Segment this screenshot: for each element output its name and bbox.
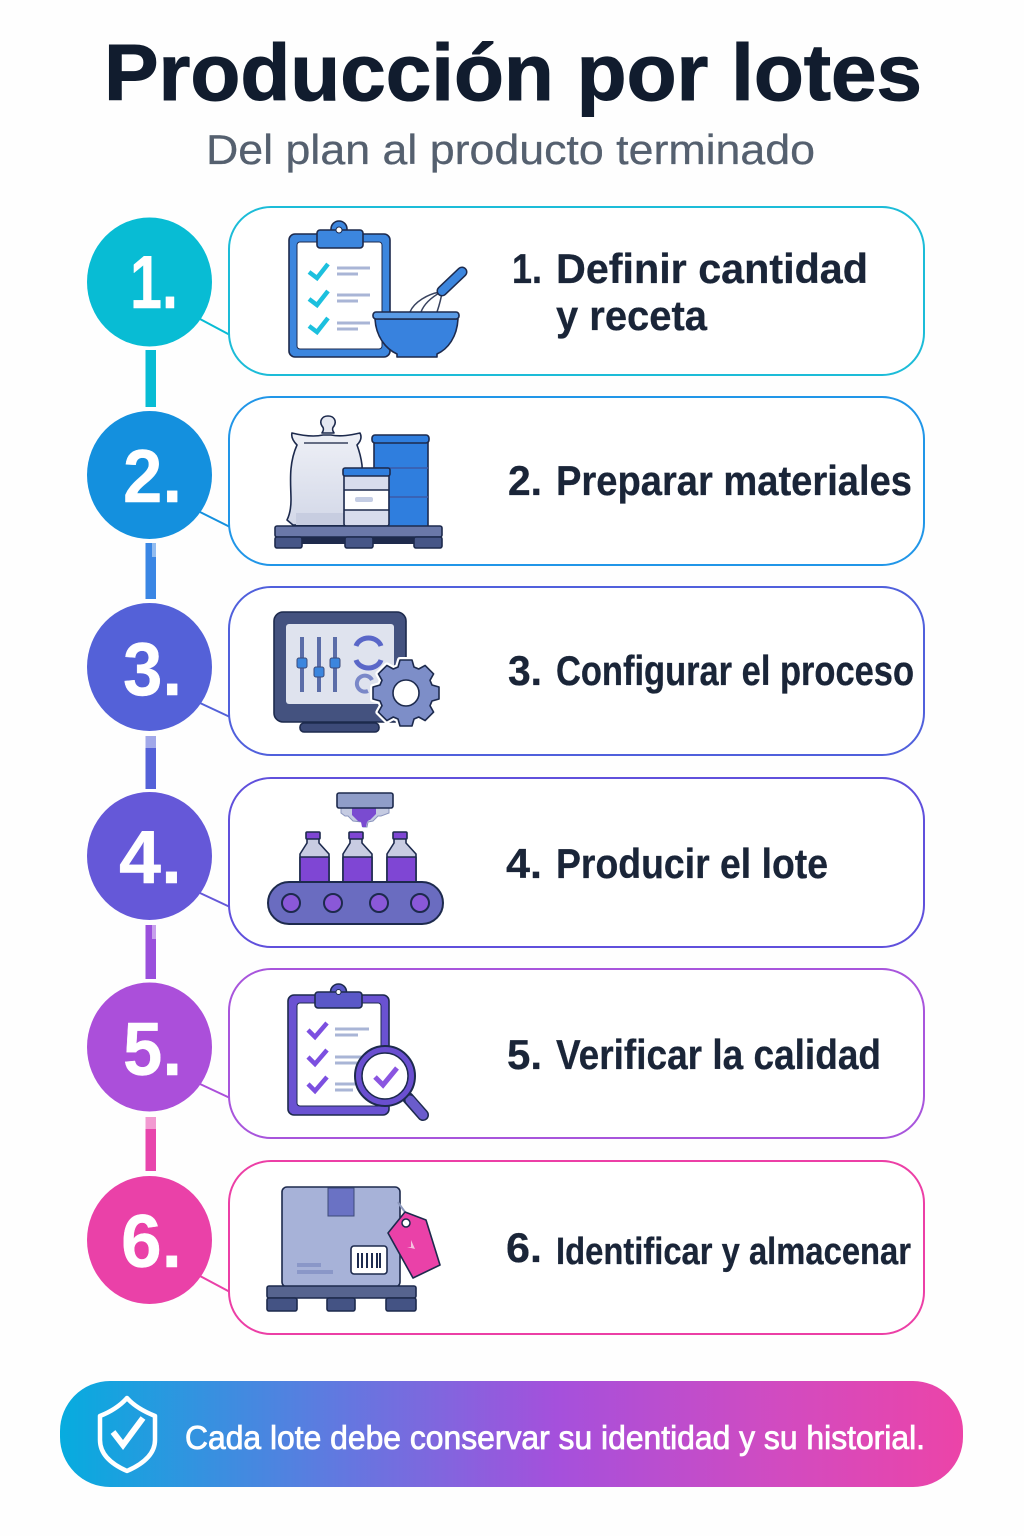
connector: step 1 to 2	[146, 350, 156, 407]
callout text: Cada lote debe conservar su identidad y su historial.	[185, 1419, 925, 1456]
connector: step 3 to 4	[146, 736, 156, 789]
number badge 2	[87, 411, 212, 539]
step 1 label: Definir cantidad	[556, 245, 868, 292]
step 1 label: 1.	[512, 245, 542, 292]
panel: step 2 card	[229, 397, 924, 565]
number badge 3: 3.	[123, 627, 182, 711]
icon: sack, jar and barrel on pallet	[275, 416, 442, 548]
leader line 5	[200, 1084, 230, 1098]
callout banner	[60, 1381, 963, 1487]
step 2 label: Preparar materiales	[556, 457, 912, 504]
panel: step 4 card	[229, 778, 924, 947]
panel: step 5 card	[229, 969, 924, 1138]
number badge 6: 6.	[121, 1199, 182, 1283]
step 3	[87, 587, 924, 755]
step 6 label	[506, 1224, 911, 1273]
number badge 5: 5.	[123, 1007, 182, 1091]
icon: bottles on conveyor under filling nozzle	[268, 793, 443, 924]
number badge 4	[87, 792, 212, 920]
panel: step 6 card	[229, 1161, 924, 1334]
step 1 label: y receta	[556, 292, 708, 339]
panel: step 1 card	[229, 207, 924, 375]
step 2 label: 2.	[508, 457, 542, 504]
connector: step 4 to 5	[146, 925, 156, 979]
step 3 label: Configurar el proceso	[556, 647, 914, 694]
number badge 1	[87, 218, 212, 346]
leader line 1	[200, 319, 230, 335]
step 4 label: Producir el lote	[556, 840, 828, 887]
leader line 4	[200, 893, 230, 907]
number badge 5	[87, 982, 212, 1112]
icon: labelled box on pallet with tag	[267, 1187, 440, 1311]
step 4 label: 4.	[506, 840, 542, 887]
step 1	[87, 207, 924, 375]
title: Producción por lotes	[104, 28, 922, 117]
step 1 label	[512, 245, 868, 339]
step 5 label: 5.	[507, 1031, 542, 1078]
step 3 label: 3.	[508, 647, 542, 694]
subtitle: Del plan al producto terminado	[206, 126, 815, 173]
step 6 label: 6.	[506, 1224, 542, 1271]
number badge 2: 2.	[123, 434, 182, 518]
step 6	[87, 1161, 924, 1334]
icon: shield with check	[100, 1398, 155, 1471]
number badge 4: 4.	[119, 815, 182, 899]
leader line 6	[200, 1276, 230, 1292]
icon: control monitor with gear	[274, 612, 439, 732]
icon: clipboard with checks, bowl and whisk	[289, 221, 462, 357]
step 5	[87, 969, 924, 1138]
connector: step 2 to 3	[146, 543, 156, 599]
step 4	[87, 778, 924, 947]
leader line 3	[200, 703, 230, 717]
step 2	[87, 397, 924, 565]
number badge 1: 1.	[130, 240, 178, 324]
step 5 label: Verificar la calidad	[556, 1031, 881, 1078]
leader line 2	[200, 512, 230, 527]
number badge 3	[87, 603, 212, 731]
panel: step 3 card	[229, 587, 924, 755]
icon: quality checklist with magnifier	[288, 984, 423, 1115]
connector: step 5 to 6	[146, 1117, 156, 1171]
number badge 6	[87, 1176, 212, 1304]
step 6 label: Identificar y almacenar	[556, 1231, 911, 1273]
